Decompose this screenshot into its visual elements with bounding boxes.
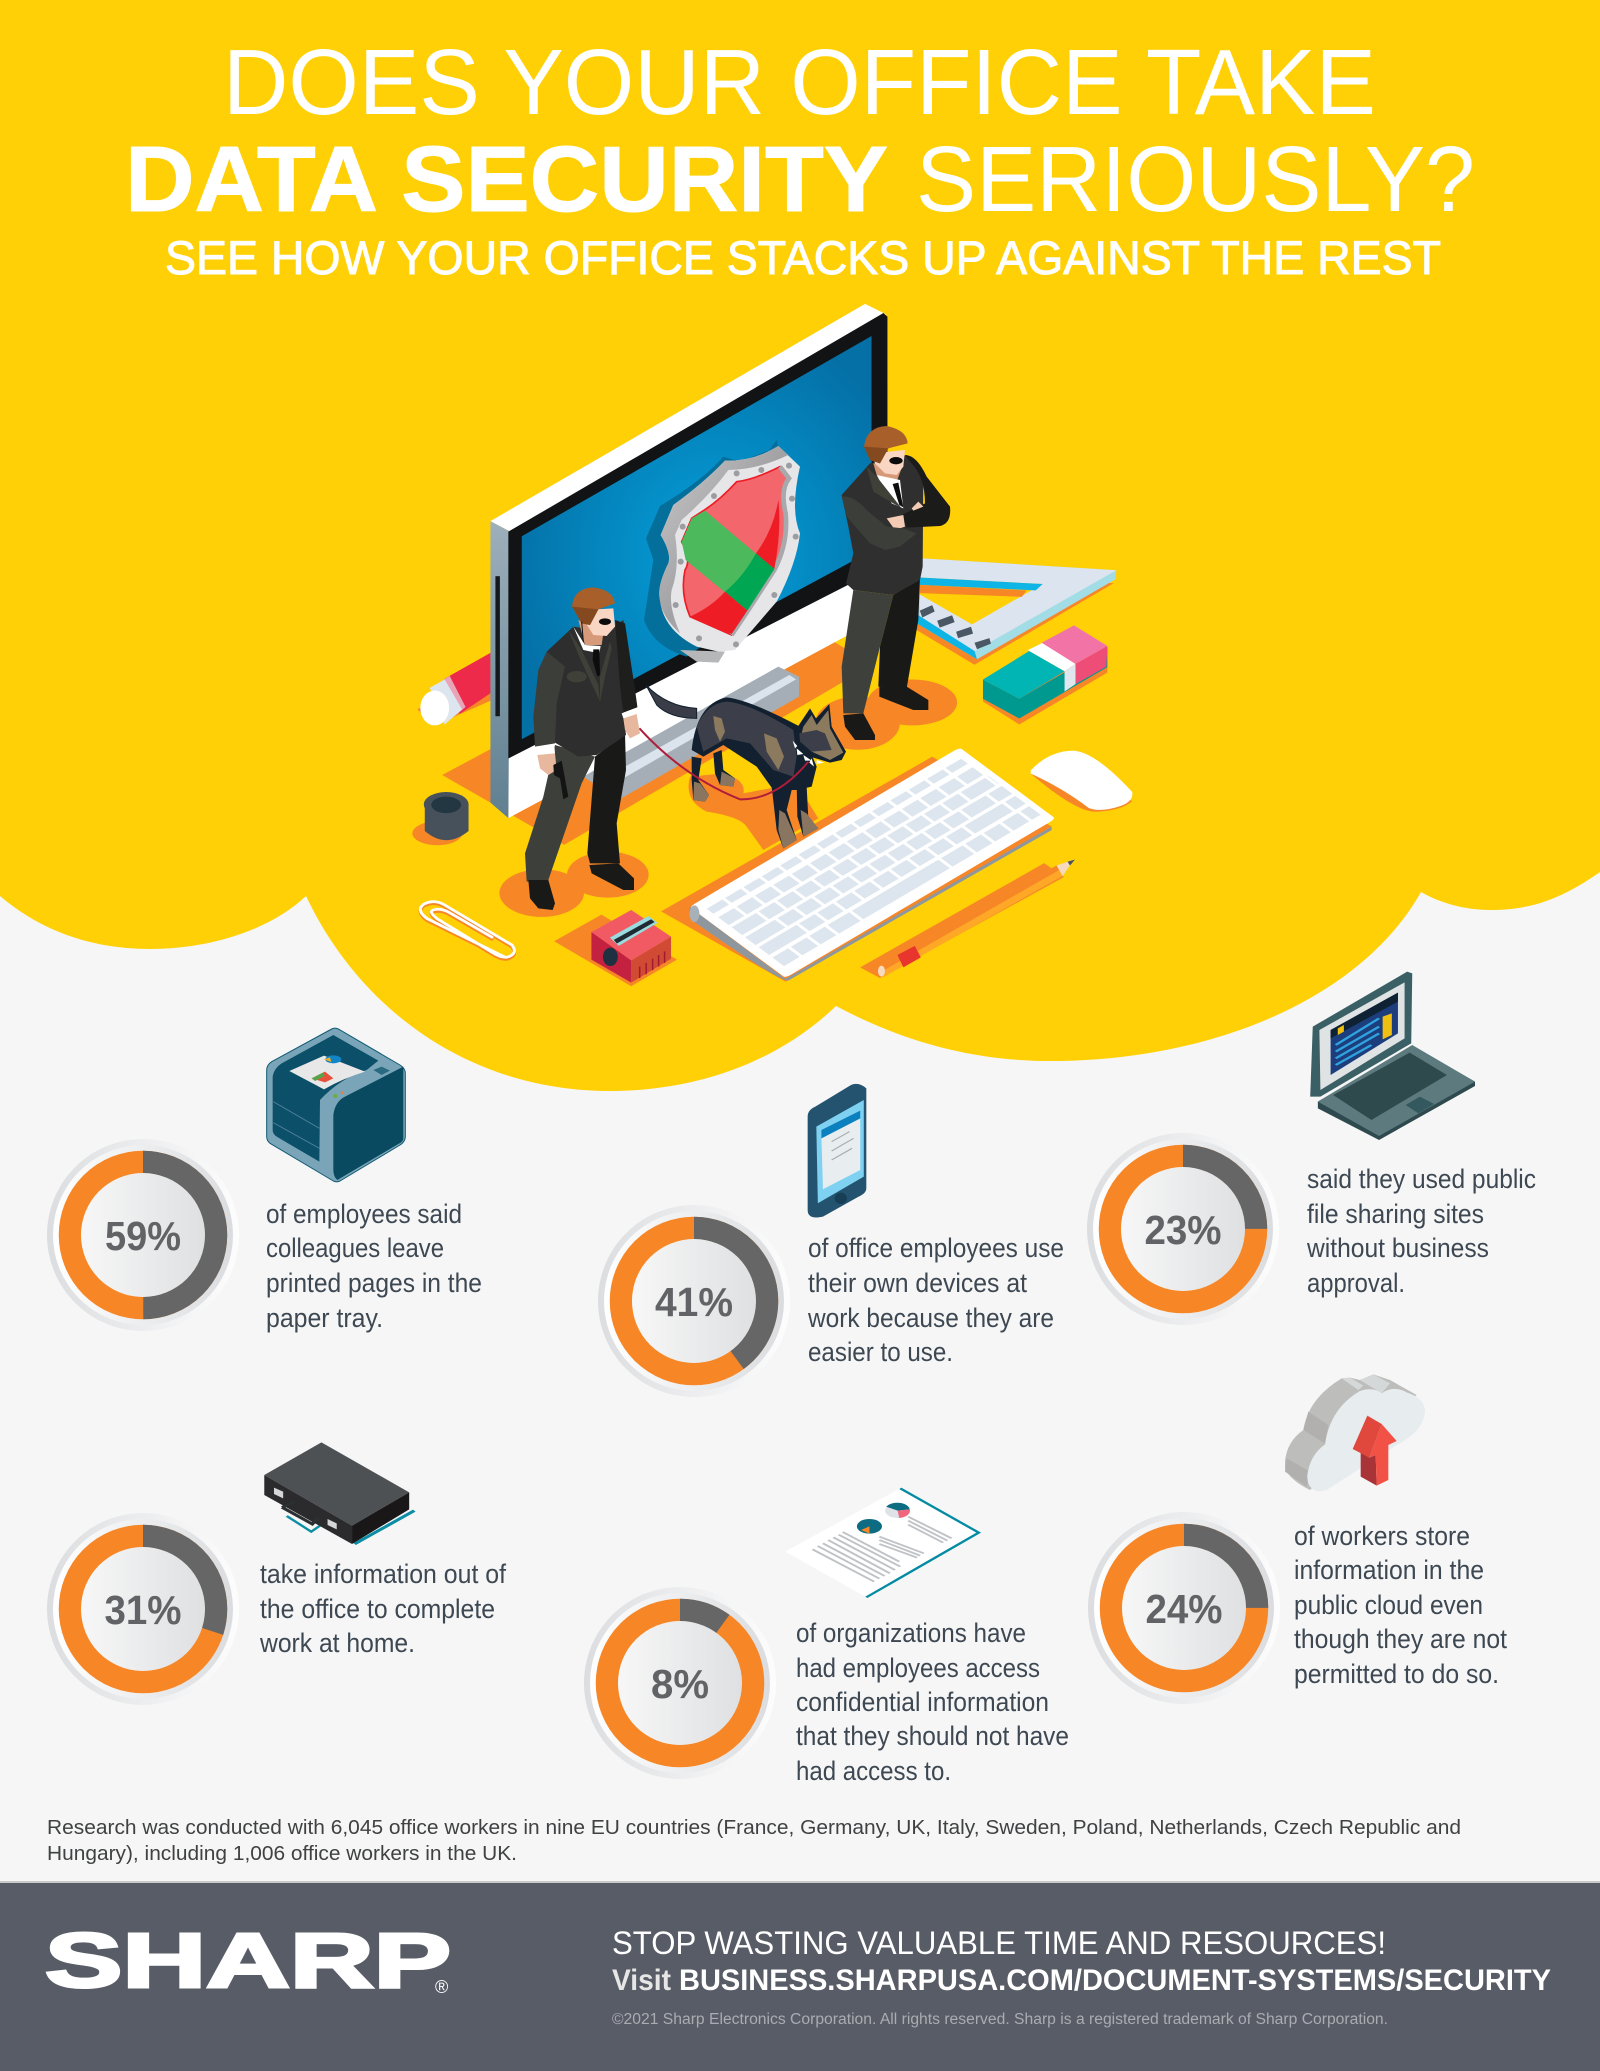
text: 41% description: their own devices at — [808, 1268, 1027, 1298]
shield and right guard — [644, 426, 950, 740]
text: 31% description: the office to complete — [260, 1594, 495, 1624]
research note: Research was conducted with 6,045 office workers in nine EU countries (France, Germany, UK, Italy, Sweden, Poland, Netherlands, Czech Republic and — [47, 1817, 1461, 1839]
research note: Hungary), including 1,006 office workers in the UK. — [47, 1843, 517, 1865]
icon: briefcase — [264, 1442, 414, 1544]
keyboard, stand, dog and left guard — [525, 587, 846, 910]
orange floor shadows — [412, 578, 1132, 986]
text: 31% description: take information out of — [260, 1559, 506, 1589]
yellow cloud header background — [0, 0, 1600, 1091]
computer monitor — [490, 304, 887, 818]
donut chart 24%: 24% — [1146, 1586, 1222, 1632]
text: 8% description: had access to. — [796, 1756, 951, 1786]
donut chart 59%: 59% — [105, 1213, 181, 1259]
text: 8% description — [796, 1618, 1069, 1786]
text: 59% description: printed pages in the — [266, 1268, 482, 1298]
icon: smartphone — [808, 1084, 866, 1217]
pencil — [878, 860, 1075, 977]
ink pot — [424, 792, 469, 840]
icon: laptop — [1310, 972, 1475, 1140]
text: 59% description: of employees said — [266, 1199, 462, 1229]
donut chart 31%: 31% — [104, 1587, 182, 1633]
donut chart 8%: 8% — [651, 1661, 709, 1707]
text: 41% description: of office employees use — [808, 1233, 1064, 1263]
text: 41% description — [807, 1233, 1064, 1367]
title: DOES YOUR OFFICE TAKE — [223, 30, 1376, 134]
text: 24% description — [1294, 1521, 1507, 1689]
icon: cloud upload — [1285, 1374, 1425, 1492]
text: 8% description: that they should not have — [796, 1721, 1069, 1751]
donut chart 31% — [47, 1513, 239, 1705]
left security guard with pistol — [525, 587, 640, 910]
text: 31% description: work at home. — [259, 1628, 415, 1658]
text: 24% description: permitted to do so. — [1294, 1659, 1499, 1689]
text: 41% description: easier to use. — [808, 1337, 953, 1367]
triangle ruler — [915, 558, 1116, 659]
title: DATA SECURITY — [125, 127, 888, 231]
stat: 8% access confidential information — [584, 1488, 1069, 1786]
text: 31% description — [259, 1559, 506, 1658]
donut chart 23% — [1087, 1133, 1279, 1325]
text: 24% description: information in the — [1294, 1555, 1484, 1585]
keyboard — [689, 747, 1056, 981]
text: 59% description: colleagues leave — [266, 1233, 444, 1263]
donut chart 59% — [47, 1139, 239, 1331]
donut chart 8% — [584, 1587, 776, 1779]
text: 41% description: work because they are — [807, 1303, 1054, 1333]
text: 23% description: approval. — [1307, 1268, 1405, 1298]
hero illustration: guards protecting computer — [412, 304, 1132, 986]
donut chart 41%: 41% — [655, 1279, 733, 1325]
Sharp logo — [45, 1918, 451, 2004]
text: 8% description: of organizations have — [796, 1618, 1026, 1648]
eraser — [983, 625, 1107, 719]
copyright: ©2021 Sharp Electronics Corporation. All rights reserved. Sharp is a registered trademark of Sharp Corporation. — [612, 2011, 1388, 2028]
donut chart 23%: 23% — [1144, 1207, 1222, 1253]
text: 8% description: confidential information — [796, 1687, 1049, 1717]
text: 59% description: paper tray. — [266, 1303, 383, 1333]
floor and desk objects — [412, 304, 1132, 986]
text: 24% description: public cloud even — [1294, 1590, 1483, 1620]
text: 59% description — [266, 1199, 482, 1333]
stat: 31% take information home — [47, 1442, 506, 1705]
donut chart 41% — [598, 1205, 790, 1397]
research note — [47, 1817, 1461, 1865]
monitor stand — [583, 667, 799, 800]
stat: 23% public file sharing — [1087, 972, 1536, 1325]
paper clip — [420, 902, 514, 959]
red marker pen — [420, 653, 490, 725]
text: 23% description — [1306, 1164, 1536, 1298]
title: SERIOUSLY? — [916, 127, 1475, 231]
icon: document — [785, 1488, 979, 1597]
text: 23% description: file sharing sites — [1307, 1199, 1484, 1229]
text: 24% description: of workers store — [1294, 1521, 1470, 1551]
dog shadow — [689, 773, 818, 850]
call to action: BUSINESS.SHARPUSA.COM/DOCUMENT-SYSTEMS/SECURITY — [679, 1964, 1551, 1997]
title — [125, 30, 1475, 231]
text: 24% description: though they are not — [1294, 1624, 1507, 1654]
donut chart 24% — [1088, 1512, 1280, 1704]
text: 23% description: said they used public — [1307, 1164, 1536, 1194]
right security guard — [842, 426, 950, 740]
mouse — [1031, 751, 1132, 810]
stat: 41% use own devices — [598, 1084, 1064, 1397]
stat: 24% store in public cloud — [1088, 1374, 1507, 1704]
call to action: STOP WASTING VALUABLE TIME AND RESOURCES! — [612, 1925, 1386, 1961]
stat: 59% employees leave pages in tray — [47, 1028, 482, 1333]
Sharp logo: SHARP — [45, 1918, 451, 2004]
call to action: Visit — [612, 1964, 671, 1997]
Sharp logo: ® — [435, 1977, 448, 1997]
security shield — [644, 440, 800, 663]
icon: printer — [267, 1028, 405, 1182]
text: 8% description: had employees access — [796, 1653, 1040, 1683]
security dog with leash — [639, 685, 846, 848]
pencil sharpener — [591, 910, 671, 983]
subtitle: SEE HOW YOUR OFFICE STACKS UP AGAINST THE REST — [165, 231, 1441, 284]
text: 23% description: without business — [1306, 1233, 1489, 1263]
footer band — [0, 1881, 1600, 2071]
call to action — [612, 1925, 1551, 1997]
